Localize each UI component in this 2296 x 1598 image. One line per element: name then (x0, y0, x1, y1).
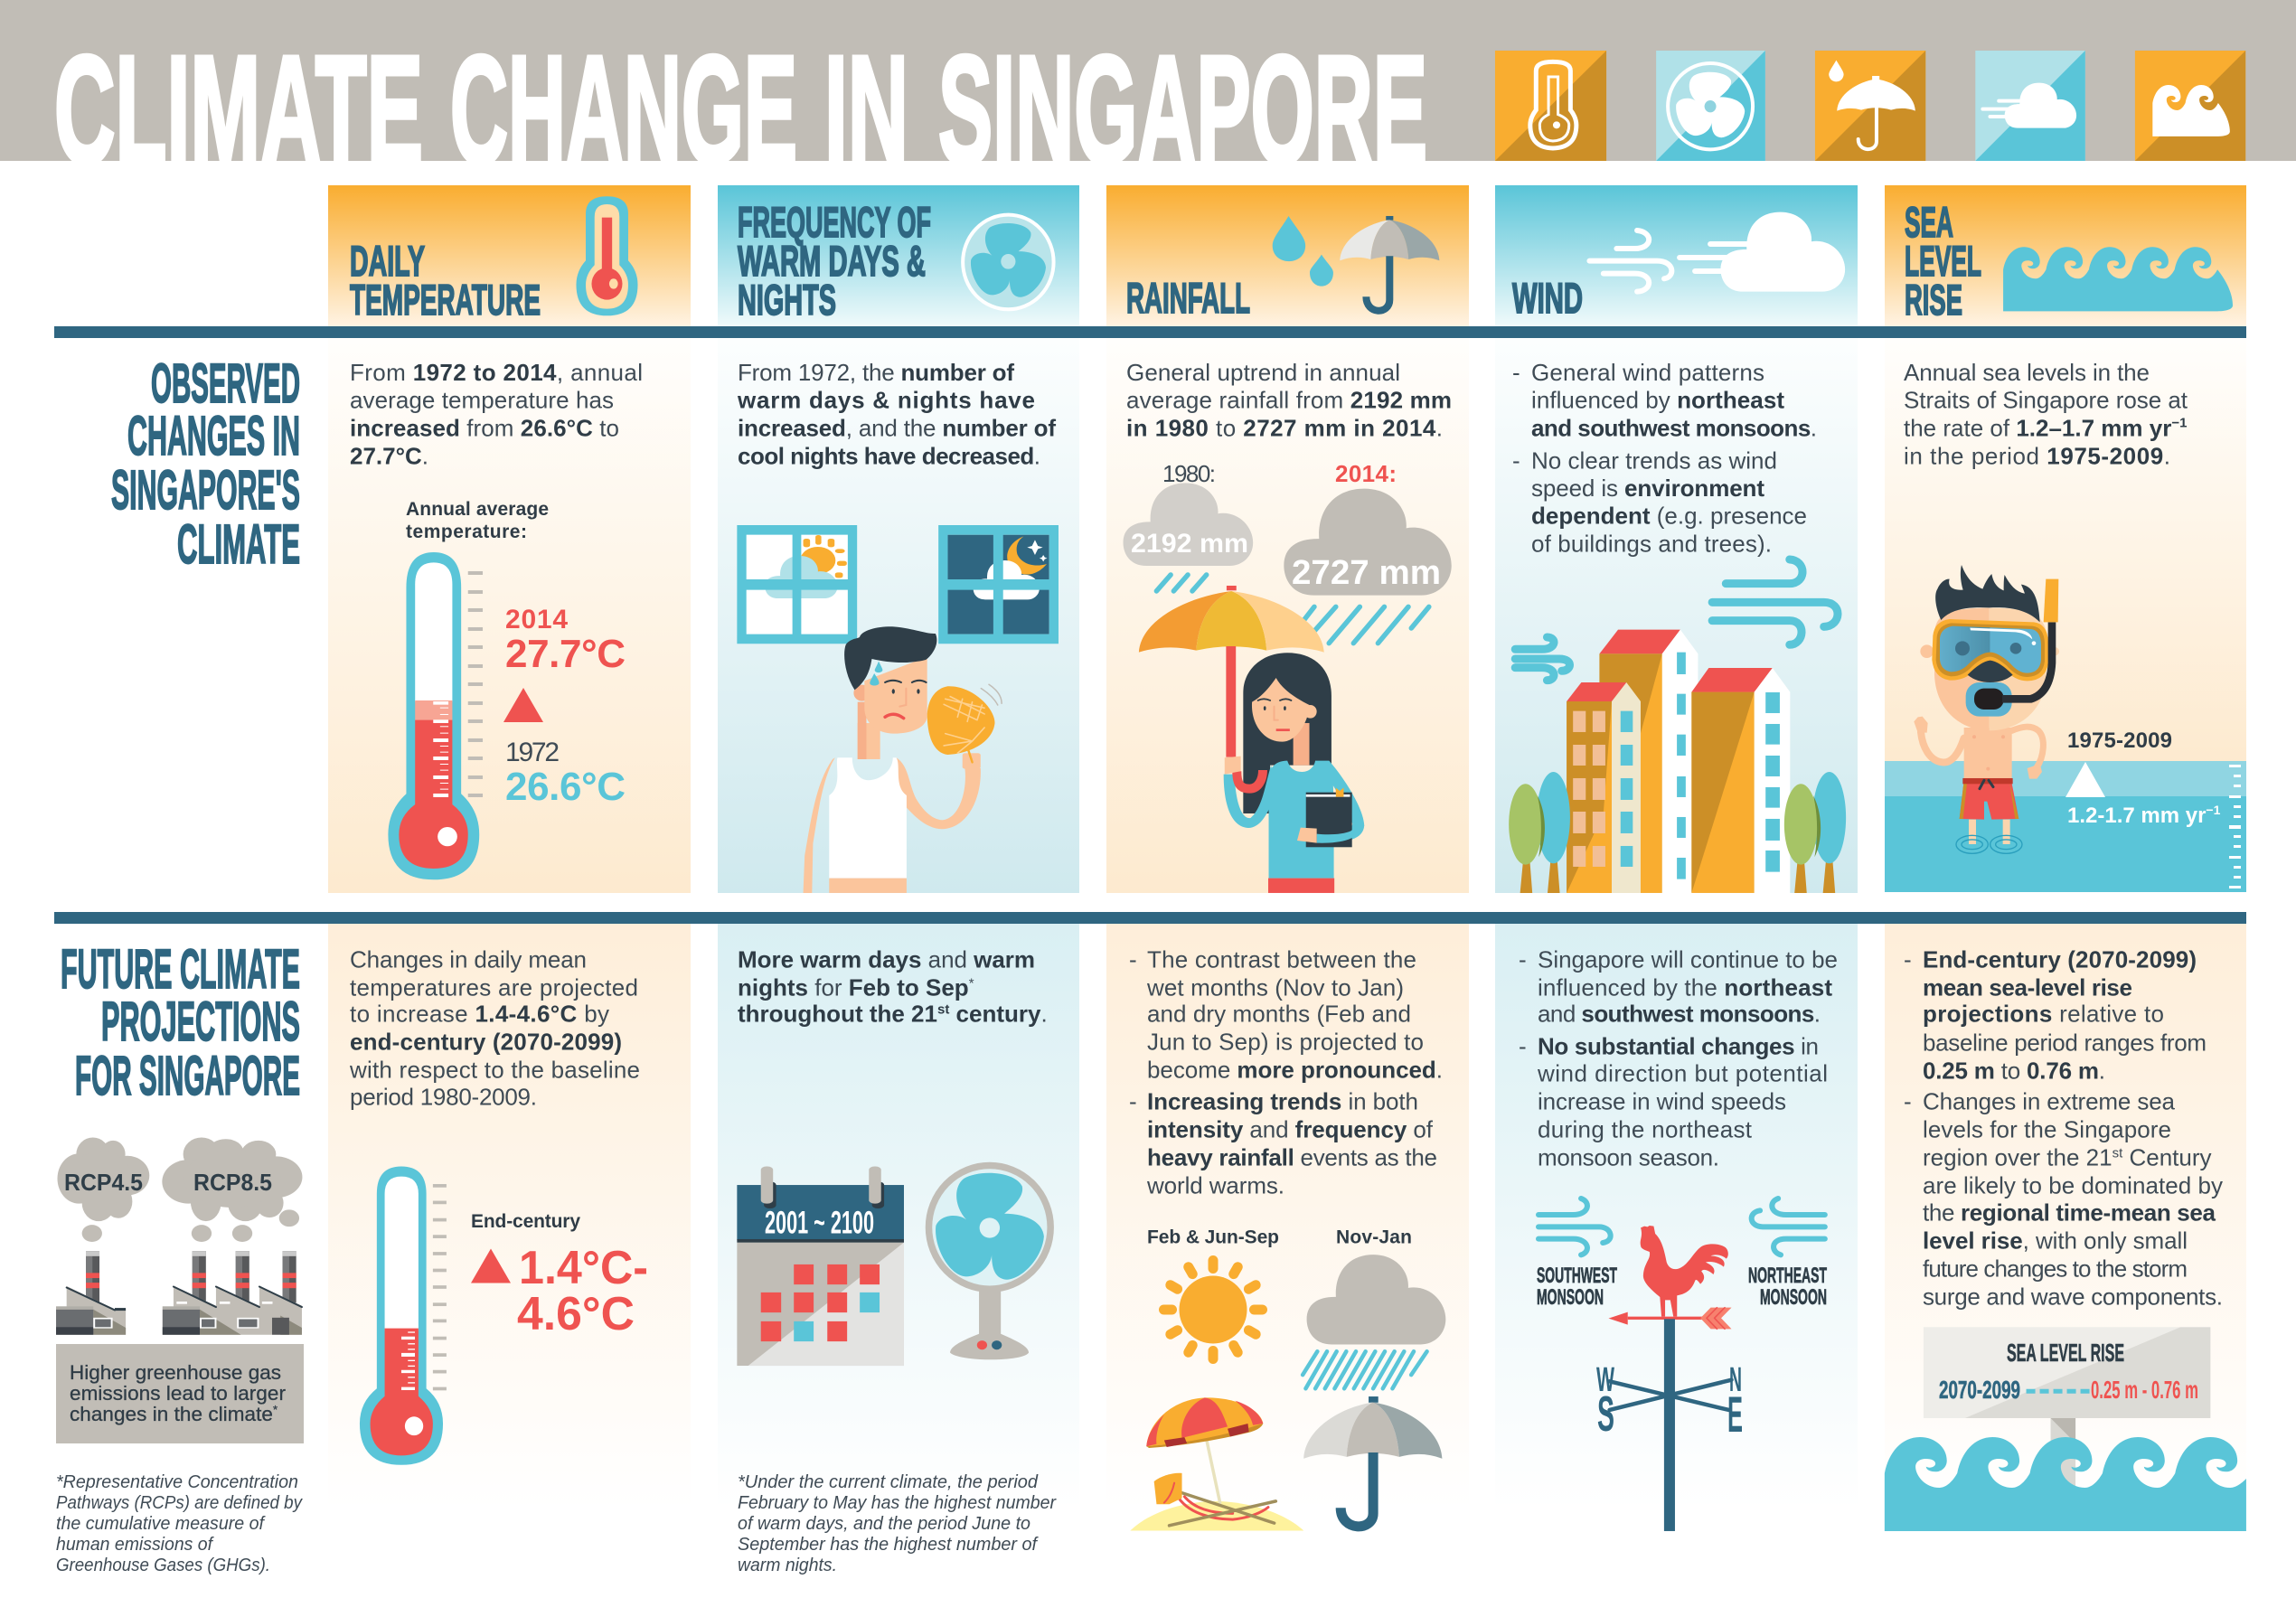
column header: frequency of warm days and nights (718, 185, 1079, 326)
footnote: RCP definition: human emissions of (56, 1535, 214, 1555)
panel: future rainfall (1106, 924, 1469, 1531)
sign post (2051, 1418, 2075, 1489)
dashed connector (2027, 1389, 2091, 1394)
value: rise rate: −1 (2206, 803, 2221, 817)
compass letters: N (1729, 1361, 1742, 1399)
column header: wind (1495, 185, 1858, 326)
footnote: warm days: *Under the current climate, the period (738, 1472, 1039, 1492)
illustration: calendar and electric fan (737, 1165, 1050, 1366)
icon: cloud and wind tile (1975, 51, 2085, 161)
text block: average temperature has (350, 387, 614, 414)
text block: Straits of Singapore rose at (1904, 387, 2188, 414)
icon: up triangle (471, 1249, 511, 1283)
cloud: RCP4.5 (57, 1138, 149, 1242)
panel: future wind (1495, 924, 1858, 1531)
value: 2192 mm: 2192 mm (1131, 529, 1248, 559)
value: 2014: 2014 (505, 605, 568, 634)
value: rise rate: 1.2-1.7 mm yr (2067, 804, 2206, 828)
text block: - (1519, 945, 1527, 973)
icon: day window (737, 525, 857, 644)
footnote: RCP definition: Pathways (RCPs) are defined by (56, 1493, 303, 1513)
text block: No clear trends as wind (1531, 446, 1777, 474)
title: CLIMATE (54, 24, 423, 196)
text block (737, 359, 1056, 470)
text block: st (937, 1001, 949, 1018)
label: annual average temperature: Annual average (406, 499, 549, 520)
text block: nights for Feb to Sep (738, 974, 969, 1001)
icon: electric fan (928, 1165, 1050, 1359)
section heading: future climate projections (61, 938, 300, 1106)
label: calendar years: 2001 ~ 2100 (765, 1206, 874, 1240)
icon: waves (2003, 247, 2233, 311)
icon: southwest wind (1539, 1198, 1611, 1255)
text block: intensity and frequency of (1147, 1115, 1434, 1142)
text block: - (1512, 359, 1520, 386)
icon: sun (1159, 1255, 1267, 1364)
text block: level rise, with only small (1923, 1227, 2188, 1255)
column header: daily temperature (328, 185, 691, 326)
text block: during the northeast (1538, 1115, 1753, 1142)
text block: No substantial changes in (1538, 1032, 1819, 1059)
text block: wet months (Nov to Jan) (1146, 974, 1404, 1001)
label: end-century: End-century (471, 1211, 580, 1232)
text block (738, 945, 1048, 1027)
illustration: rain cloud, beach and umbrella (1130, 1255, 1445, 1531)
heading: RISE (1905, 276, 1962, 324)
text: FUTURE CLIMATE (61, 938, 300, 1000)
icon: beach scene (1130, 1397, 1303, 1531)
icon: small cloud (1124, 483, 1253, 566)
panel: future warm days and nights (718, 924, 1079, 1575)
label: southwest monsoon: SOUTHWEST (1537, 1264, 1617, 1288)
panel: future wind: E (1727, 1386, 1743, 1443)
illustration: wind vane (1539, 1198, 1825, 1531)
compass letters: W (1596, 1361, 1614, 1399)
text block: - (1129, 945, 1137, 973)
sign text (1939, 1339, 2198, 1404)
text block: end-century (2070-2099) (350, 1029, 622, 1056)
illustration: emissions clouds and factories (56, 1138, 302, 1335)
text block (350, 359, 643, 470)
text block: period 1980-2009. (350, 1083, 537, 1110)
text block (1519, 945, 1838, 1171)
compass arms (1610, 1380, 1732, 1410)
panel: RCP scenarios and factories (56, 1138, 304, 1575)
text block: * (969, 976, 974, 991)
sign text: 0.25 m - 0.76 m (2091, 1376, 2198, 1404)
footnote: RCP definition: Greenhouse Gases (GHGs). (56, 1556, 270, 1575)
text block: in the period 1975-2009. (1904, 443, 2170, 470)
text block: Century (2122, 1144, 2212, 1171)
man (804, 626, 981, 893)
text block: Changes in extreme sea (1923, 1088, 2176, 1115)
text block: and dry months (Feb and (1147, 1000, 1411, 1027)
icon: fan (963, 215, 1054, 309)
text block: throughout the 21 (738, 1000, 937, 1027)
factory: single (56, 1251, 126, 1335)
value: temperature rise: 4.6°C (517, 1288, 635, 1340)
callout: greenhouse gases (56, 1344, 304, 1443)
label: annual average temperature: temperature: (406, 522, 527, 542)
heading (738, 198, 931, 324)
section heading: observed changes (111, 352, 300, 575)
icon: up triangle (503, 688, 543, 722)
label: 1975-2009: 1975-2009 (2067, 728, 2172, 753)
icon: wind gusts (1515, 559, 1838, 681)
text block: baseline period ranges from (1923, 1029, 2207, 1056)
value: 1972 (505, 738, 626, 809)
trees: right pair (1784, 772, 1846, 893)
text block: average rainfall from 2192 mm (1126, 387, 1452, 414)
factories: triple (163, 1251, 302, 1335)
text block: From 1972 to 2014, annual (350, 359, 643, 386)
icon: wave tile (2135, 51, 2245, 161)
compass letters (1596, 1361, 1743, 1443)
icon: cloud and wind (1589, 212, 1845, 292)
text block: - (1129, 1088, 1137, 1115)
text block: −1 (2171, 416, 2187, 430)
callout: greenhouse gases: emissions lead to larger (70, 1382, 286, 1405)
text block: temperatures are projected (350, 974, 638, 1001)
panel: observed rainfall (1106, 338, 1469, 893)
text block: become more pronounced. (1147, 1056, 1443, 1083)
heading: DAILY (350, 237, 425, 285)
value: 2727 mm: 2727 mm (1292, 554, 1441, 592)
text block: are likely to be dominated by (1923, 1171, 2223, 1198)
text block: the regional time-mean sea (1923, 1198, 2216, 1226)
text block: heavy rainfall events as the (1147, 1144, 1437, 1171)
text block: From 1972, the number of (738, 359, 1014, 386)
text block: mean sea-level rise (1923, 974, 2132, 1001)
text block: increase in wind speeds (1538, 1088, 1786, 1115)
panel: observed daily temperature (328, 338, 691, 893)
text block: surge and wave components. (1923, 1283, 2223, 1311)
text block: The contrast between the (1147, 945, 1416, 973)
callout: greenhouse gases: Higher greenhouse gas (70, 1361, 281, 1384)
arrow (1608, 1308, 1732, 1329)
text block (1904, 945, 2223, 1311)
title (54, 24, 1427, 196)
footnote: warm days (738, 1472, 1057, 1575)
illustration: rain clouds and woman (1124, 483, 1452, 893)
heading (1905, 198, 1981, 324)
text block: to increase 1.4-4.6°C by (350, 1000, 609, 1027)
text block: region over the 21 (1923, 1144, 2113, 1171)
waves (1885, 1437, 2246, 1531)
label: 2014: 2014: (1335, 460, 1397, 487)
text block: monsoon season. (1538, 1144, 1719, 1171)
section heading: future climate projections: PROJECTIONS (101, 991, 300, 1052)
text block: End-century (2070-2099) (1923, 945, 2197, 973)
text block: General wind patterns (1531, 359, 1764, 386)
text block: Increasing trends in both (1147, 1088, 1418, 1115)
text block (1126, 359, 1452, 441)
text block: warm days & nights have (737, 387, 1035, 414)
value: 2014 (505, 605, 626, 676)
icon: rain cloud (1303, 1255, 1445, 1388)
label: southwest monsoon (1537, 1264, 1617, 1310)
text block: Jun to Sep) is projected to (1147, 1029, 1424, 1056)
text block: 0.25 m to 0.76 m. (1923, 1058, 2105, 1085)
text block: speed is environment (1531, 475, 1764, 502)
text block: Singapore will continue to be (1538, 945, 1838, 973)
heading: FREQUENCY OF (738, 198, 931, 246)
label: northeast monsoon: MONSOON (1760, 1285, 1827, 1310)
text block (1129, 945, 1443, 1198)
illustration: man with fan and windows (737, 525, 1059, 893)
text block: future changes to the storm (1923, 1255, 2188, 1282)
text block: projections relative to (1923, 1000, 2164, 1027)
panel: future daily temperature (328, 924, 691, 1509)
trees: left pair (1509, 772, 1570, 893)
illustration: buildings, trees and wind (1509, 559, 1846, 893)
label: dry season: Feb & Jun-Sep (1147, 1227, 1279, 1247)
icon: night window (938, 525, 1059, 644)
footnote: RCP definition: the cumulative measure of (56, 1514, 266, 1534)
text block: increased from 26.6°C to (350, 414, 619, 441)
building: left (1567, 682, 1641, 893)
icon: rain drops and umbrella (1273, 216, 1439, 311)
text block: world warms. (1146, 1171, 1284, 1198)
label: 1980: 1980: (1162, 460, 1216, 487)
icon: umbrella tile (1815, 51, 1925, 161)
text block: the rate of 1.2–1.7 mm yr (1904, 414, 2171, 441)
text block: Annual sea levels in the (1904, 359, 2150, 386)
text block: - (1512, 446, 1520, 474)
icon: white triangle (2065, 762, 2105, 797)
illustration: sign and waves (1885, 1327, 2246, 1531)
icon: northeast wind (1752, 1198, 1825, 1255)
text block: influenced by northeast (1531, 387, 1784, 414)
value: temperature rise (517, 1242, 648, 1340)
text block: . (1040, 1000, 1048, 1027)
text block: st (2113, 1146, 2123, 1161)
icon: calendar (737, 1167, 904, 1366)
rooster (1641, 1226, 1728, 1317)
text block: cool nights have decreased. (738, 443, 1040, 470)
sign text: SEA LEVEL RISE (2007, 1339, 2124, 1367)
footnote: RCP definition: *Representative Concentration (56, 1472, 298, 1492)
panel: observed sea level rise (1885, 338, 2246, 892)
title: CHANGE (450, 24, 797, 196)
pole (1664, 1319, 1675, 1531)
icon: thermometer tile (1495, 51, 1606, 161)
text: FOR SINGAPORE (75, 1045, 300, 1106)
text: CHANGES IN (127, 405, 300, 466)
title: IN (824, 24, 908, 196)
label: annual average temperature (406, 499, 549, 542)
value: temperature rise: 1.4°C- (519, 1242, 648, 1294)
text block (1904, 359, 2188, 470)
text: SINGAPORE'S (111, 459, 300, 521)
value: 1972: 1972 (505, 738, 560, 767)
footnote: RCP definition (56, 1472, 303, 1575)
cloud: RCP8.5 (162, 1138, 302, 1242)
footnote: warm days: September has the highest number of (738, 1535, 1039, 1555)
rain streaks (1156, 575, 1429, 644)
column header: sea level rise (1885, 185, 2246, 326)
heading: RAINFALL (1126, 274, 1250, 322)
text block: and southwest monsoons. (1531, 414, 1817, 441)
heading: WARM DAYS & (738, 237, 926, 285)
text block: in 1980 to 2727 mm in 2014. (1126, 414, 1443, 441)
text block: influenced by the northeast (1538, 974, 1832, 1001)
text block (349, 945, 640, 1110)
section heading: observed changes: CLIMATE (177, 513, 300, 575)
icon: grey umbrella (1303, 1396, 1442, 1527)
text block (1512, 359, 1817, 557)
thermometer (360, 1167, 447, 1465)
compass letters: S (1597, 1386, 1614, 1442)
text block: General uptrend in annual (1126, 359, 1400, 386)
value: 1972: 26.6°C (505, 765, 626, 809)
heading: LEVEL (1905, 237, 1981, 285)
heading: SEA (1905, 198, 1953, 246)
value: 2014: 27.7°C (505, 632, 626, 676)
text block: - (1904, 945, 1912, 973)
heading: WIND (1512, 274, 1583, 322)
label: northeast monsoon: NORTHEAST (1748, 1264, 1827, 1288)
icon: fan tile (1656, 51, 1765, 161)
column header: rainfall (1106, 185, 1469, 326)
title banner (0, 0, 2296, 196)
sign text: 2070-2099 (1939, 1376, 2020, 1404)
icon: orange umbrella (1139, 586, 1324, 653)
title: SINGAPORE (938, 24, 1427, 196)
text block: and southwest monsoons. (1538, 1000, 1821, 1027)
header icons row (1495, 51, 2245, 161)
text block: of buildings and trees). (1531, 530, 1772, 557)
illustration: snorkel boy (1914, 565, 2059, 853)
text block: More warm days and warm (738, 945, 1035, 973)
text block: with respect to the baseline (349, 1056, 640, 1083)
heading (350, 237, 541, 324)
panel: observed warm days and nights (718, 338, 1079, 893)
text block: 27.7°C. (350, 443, 428, 470)
footnote: warm days: February to May has the highest number (738, 1493, 1057, 1513)
text block: dependent (e.g. presence (1531, 503, 1807, 530)
text block: - (1904, 1088, 1912, 1115)
heading: TEMPERATURE (350, 276, 541, 324)
text: OBSERVED (151, 352, 300, 414)
footnote: warm days: warm nights. (738, 1556, 837, 1575)
icon: hand fan (927, 684, 1002, 755)
footnote: warm days: of warm days, and the period June to (738, 1514, 1030, 1534)
callout: greenhouse gases: * (273, 1403, 278, 1416)
label: RCP4.5: RCP4.5 (64, 1169, 143, 1196)
sign board (1924, 1327, 2210, 1418)
woman (1224, 646, 1364, 893)
text block: century (949, 1000, 1041, 1027)
label: northeast monsoon (1748, 1264, 1827, 1310)
panel: observed wind (1495, 338, 1858, 893)
label: RCP8.5: RCP8.5 (193, 1169, 272, 1196)
icon: thermometer (576, 196, 638, 315)
panel: future sea level rise (1885, 924, 2246, 1531)
text block: increased, and the number of (738, 414, 1056, 441)
building: center (1599, 630, 1698, 893)
text block: Changes in daily mean (350, 945, 587, 973)
label: southwest monsoon: MONSOON (1537, 1285, 1604, 1310)
thermometer (388, 552, 483, 879)
heading: NIGHTS (738, 276, 836, 324)
ruler (2229, 765, 2241, 888)
label: wet season: Nov-Jan (1336, 1227, 1412, 1247)
text block: wind direction but potential (1537, 1059, 1828, 1086)
callout: greenhouse gases: changes in the climate (70, 1403, 273, 1425)
text block: levels for the Singapore (1923, 1115, 2171, 1142)
building: right (1691, 668, 1790, 893)
text block: - (1519, 1032, 1527, 1059)
icon: large cloud (1284, 489, 1452, 596)
